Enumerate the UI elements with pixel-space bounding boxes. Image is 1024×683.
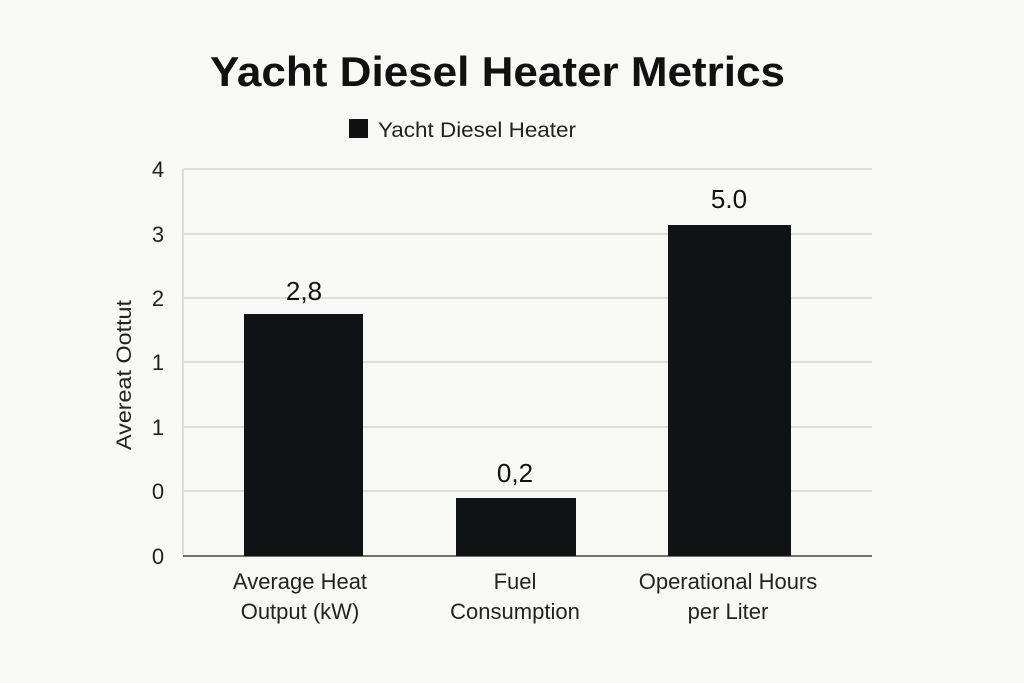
y-axis ticks: 3 xyxy=(152,222,164,247)
y-axis ticks: 0 xyxy=(152,544,164,569)
x-axis labels: Fuel xyxy=(494,569,536,594)
y-axis ticks: 1 xyxy=(152,415,164,440)
x-axis labels: Operational Hours xyxy=(639,569,817,594)
x-axis labels: Average Heat xyxy=(233,569,367,594)
y-axis ticks: 4 xyxy=(152,157,164,182)
y-axis ticks: 0 xyxy=(152,479,164,504)
bar: operational hours: 5.0 xyxy=(711,184,747,214)
x-axis labels xyxy=(233,569,817,624)
title: Yacht Diesel Heater Metrics xyxy=(210,48,785,95)
x-axis labels: per Liter xyxy=(688,599,768,624)
y-axis label: Avereat Oottut xyxy=(113,300,136,450)
x-axis labels: Consumption xyxy=(450,599,580,624)
legend: Yacht Diesel Heater xyxy=(378,119,576,142)
y-axis ticks: 2 xyxy=(152,286,164,311)
bar: fuel consumption xyxy=(456,458,576,556)
bar: average heat output: 2,8 xyxy=(286,276,322,306)
y-axis ticks: 1 xyxy=(152,350,164,375)
bar: operational hours xyxy=(668,184,791,556)
x-axis labels: Output (kW) xyxy=(241,599,359,624)
bar: average heat output xyxy=(244,276,363,556)
y-axis ticks xyxy=(152,157,164,569)
bar: fuel consumption: 0,2 xyxy=(497,458,533,488)
